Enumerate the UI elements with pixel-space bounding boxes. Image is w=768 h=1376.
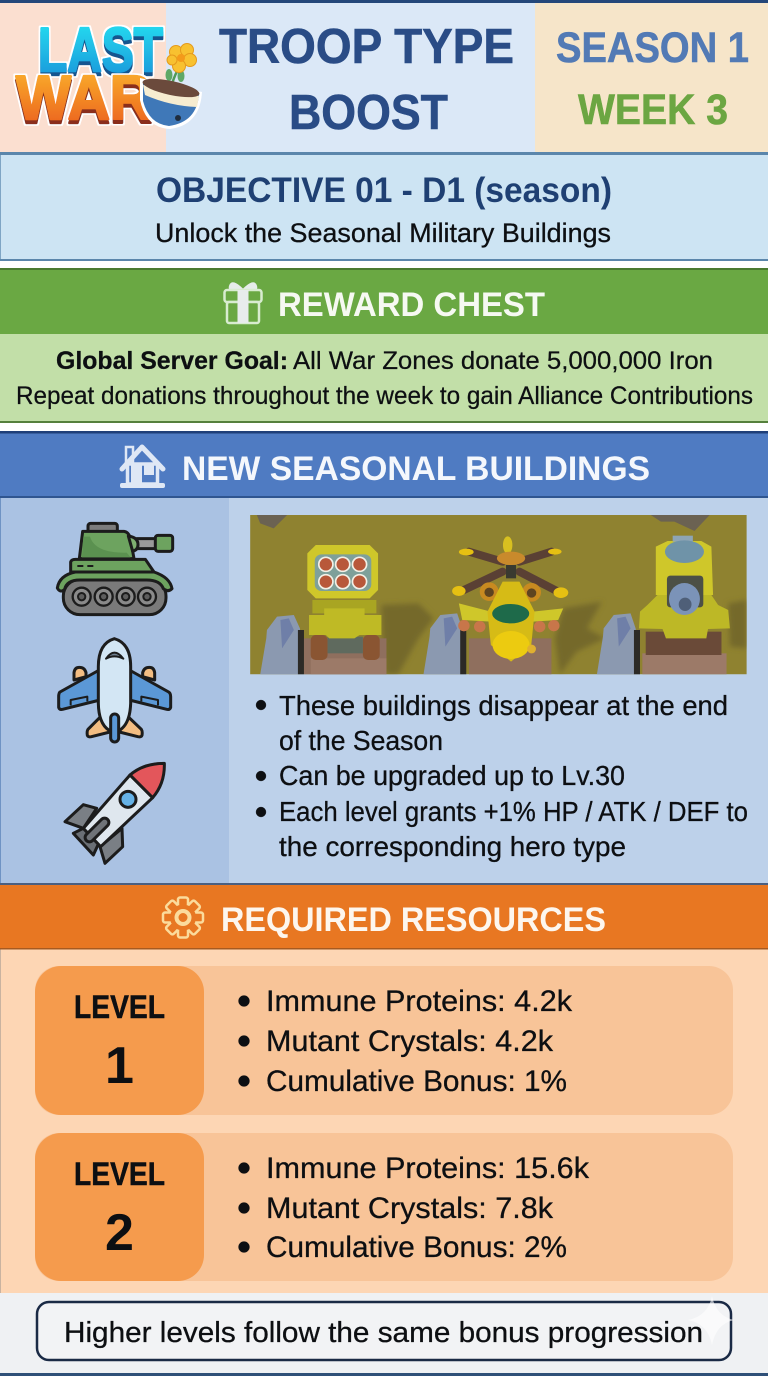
title: TROOP TYPE <box>219 20 514 74</box>
level 2 resource list: Mutant Crystals: 7.8k <box>266 1192 554 1225</box>
icon: sparkle <box>688 1296 734 1345</box>
reward heading: REWARD CHEST <box>278 286 545 324</box>
logo: Last War: WAR <box>16 64 152 133</box>
objective heading: OBJECTIVE 01 - D1 (season) <box>156 171 612 210</box>
panel: reward chest <box>0 268 768 423</box>
badge: level 1: 1 <box>105 1037 134 1095</box>
badge: level 2: LEVEL <box>74 1156 165 1192</box>
building notes list: Can be upgraded up to Lv.30 <box>279 760 625 791</box>
icon: gear <box>163 898 203 938</box>
reward goal text <box>56 347 713 375</box>
badge: level 2: 2 <box>105 1204 134 1262</box>
panel: objective <box>0 155 768 261</box>
badge: level 1: LEVEL <box>74 989 165 1025</box>
logo: Last War <box>16 16 202 133</box>
season and week label: WEEK 3 <box>578 86 728 134</box>
reward repeat text: Repeat donations throughout the week to gain Alliance Contributions <box>16 382 753 410</box>
cannon building <box>597 536 730 674</box>
card: level 1 <box>35 966 733 1115</box>
reward goal text: Global Server Goal: <box>56 347 288 375</box>
panel: header <box>0 0 768 155</box>
building notes list: of the Season <box>279 725 443 756</box>
season and week label: SEASON 1 <box>556 24 749 72</box>
icon: airplane <box>59 639 171 742</box>
building notes list: the corresponding hero type <box>279 831 626 862</box>
level 1 resource list: Mutant Crystals: 4.2k <box>266 1025 554 1058</box>
icon: rocket <box>65 763 164 863</box>
season and week label <box>556 24 749 134</box>
panel: required resources <box>0 883 768 1293</box>
level 2 resource list: Cumulative Bonus: 2% <box>266 1231 567 1264</box>
level 1 resource list: Cumulative Bonus: 1% <box>266 1065 567 1098</box>
logo: Last War: LAST <box>38 16 163 85</box>
panel: footer note <box>0 1293 768 1376</box>
level 1 resource list <box>238 985 573 1098</box>
icon: gift <box>224 283 262 323</box>
badge: level 2 <box>35 1133 204 1281</box>
badge: level 1 <box>35 966 204 1115</box>
level 1 resource list: Immune Proteins: 4.2k <box>266 985 573 1018</box>
footer text: Higher levels follow the same bonus progression <box>64 1317 703 1349</box>
level 2 resource list <box>238 1152 590 1264</box>
building notes list <box>256 690 748 862</box>
panel: new seasonal buildings <box>0 431 768 883</box>
objective description: Unlock the Seasonal Military Buildings <box>155 218 611 248</box>
title <box>219 20 514 140</box>
icon: house <box>120 447 165 488</box>
level 2 resource list: Immune Proteins: 15.6k <box>266 1152 590 1185</box>
helicopter building <box>424 536 568 674</box>
section heading: NEW SEASONAL BUILDINGS <box>182 450 650 488</box>
icon: tank <box>57 523 173 615</box>
building photo <box>250 515 747 674</box>
card: level 2 <box>35 1133 733 1281</box>
building notes list: These buildings disappear at the end <box>279 690 728 721</box>
reward goal text: All War Zones donate 5,000,000 Iron <box>293 347 713 375</box>
title: BOOST <box>289 86 448 140</box>
launcher building <box>260 545 386 674</box>
section heading: REQUIRED RESOURCES <box>221 901 606 939</box>
